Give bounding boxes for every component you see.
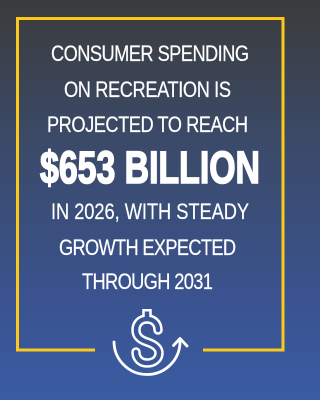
icon: circular arrow — [114, 338, 187, 374]
icon: dollar sign — [136, 309, 159, 367]
yellow frame — [18, 18, 283, 350]
intro text: ON RECREATION IS — [64, 79, 231, 102]
closing text: GROWTH EXPECTED — [59, 237, 236, 260]
icon: dollar with growth arrow — [114, 309, 187, 374]
intro text: PROJECTED TO REACH — [47, 114, 248, 137]
closing text: THROUGH 2031 — [82, 271, 213, 294]
intro text: CONSUMER SPENDING — [51, 43, 249, 66]
closing text: IN 2026, WITH STEADY — [51, 201, 250, 224]
intro text — [47, 43, 249, 137]
closing text — [51, 201, 250, 294]
